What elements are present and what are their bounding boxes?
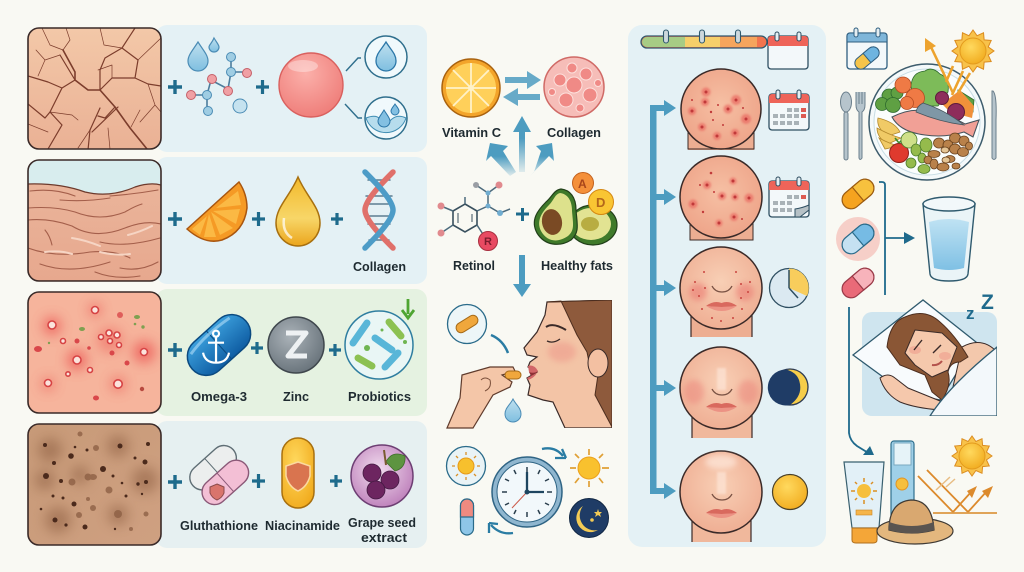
icon: collagen cells <box>544 57 604 117</box>
arrow: down <box>513 255 531 297</box>
icon: clock <box>492 457 562 527</box>
icon: calendar with capsule <box>847 28 887 72</box>
icon: niacinamide capsule <box>282 438 314 508</box>
icon: blank calendar <box>768 32 808 69</box>
arrow tree <box>650 100 676 499</box>
panel: acne row <box>28 289 427 416</box>
bracket and arrow to water <box>879 182 915 295</box>
icon: half clock <box>770 268 809 308</box>
panel: dry skin row <box>28 25 427 152</box>
icon: zinc coin <box>268 317 324 373</box>
label: Zzz: Z <box>981 291 994 314</box>
icon: spoon <box>840 92 852 160</box>
icon: plate of food <box>869 64 985 180</box>
icon: pink capsule <box>838 265 878 301</box>
icon: capsule badge <box>448 304 486 344</box>
label: Collagen: Collagen <box>353 259 406 274</box>
panel: wrinkled skin row <box>28 157 427 284</box>
label: Niacinamide: Niacinamide <box>265 518 340 533</box>
icon: retinol molecule: R <box>484 236 492 248</box>
arrow: to mouth <box>491 335 508 353</box>
plus sign <box>256 80 269 94</box>
panel: healing timeline <box>628 25 826 547</box>
plus sign <box>330 475 342 487</box>
icon: pill <box>460 499 474 535</box>
icon: fork <box>856 92 865 160</box>
illustration: timing clock <box>446 446 609 538</box>
icon: orange slice <box>442 59 500 117</box>
icon: sun reflected on ground <box>918 436 997 513</box>
plus sign <box>168 475 182 489</box>
icon: calendar week 2 <box>769 177 809 217</box>
icon: highlighted blue capsule <box>836 217 880 261</box>
icon: knife <box>992 91 996 160</box>
icon: probiotics <box>345 311 413 379</box>
face: moderate acne <box>680 156 762 240</box>
icon: grape seed extract <box>351 445 413 507</box>
panel: vitamin and collagen cycle <box>438 57 617 297</box>
icon: orange capsule <box>838 176 878 212</box>
plus sign <box>168 343 182 357</box>
plus sign <box>252 212 265 226</box>
icon: avocado and vitamins: A <box>578 177 587 191</box>
face: severe acne <box>681 69 761 150</box>
arrow: to sun protection <box>849 307 874 455</box>
icon: pink sphere <box>279 53 343 117</box>
arrow: clockwise top <box>542 448 566 458</box>
nuts <box>924 133 972 171</box>
label: Zinc: Zinc <box>283 389 309 404</box>
plus sign <box>329 344 341 356</box>
plus sign <box>168 212 182 226</box>
icon: down arrow <box>402 299 414 318</box>
illustration: taking a capsule <box>447 300 612 428</box>
icon: retinol molecule <box>438 182 510 250</box>
skin tile: acne <box>28 292 161 413</box>
icon: sunscreen tube <box>844 462 884 543</box>
label: Grape seed extract: extract <box>361 530 408 545</box>
panel: pigmentation row <box>28 421 427 548</box>
icon: collagen helix <box>365 172 393 248</box>
plus sign <box>251 342 263 354</box>
icon: sun badge <box>446 446 486 486</box>
hand with capsule <box>447 367 521 428</box>
illustration: sleeping woman <box>853 300 997 416</box>
icon: glass of water <box>923 197 975 281</box>
face: healed skin <box>680 451 762 542</box>
label: Grape seed extract: Grape seed <box>348 515 416 530</box>
icon: sun with rays <box>925 30 994 95</box>
label: Omega-3: Omega-3 <box>191 389 247 404</box>
icon: full sun disc <box>772 474 808 510</box>
icon: omega-3 capsule <box>178 305 259 384</box>
plus sign <box>168 80 182 94</box>
panel: lifestyle column <box>836 28 997 544</box>
icon: water absorption badge <box>365 97 407 139</box>
label: Grape seed extract <box>348 515 416 545</box>
icon: hydration drop badge <box>365 36 407 78</box>
arrows: upward <box>486 116 554 176</box>
icon: glutathione capsules <box>185 440 254 510</box>
icon: straw hat <box>877 500 953 544</box>
face: mild acne <box>680 247 762 337</box>
plus sign <box>252 474 265 488</box>
face: clear skin with slight redness <box>680 347 762 438</box>
arrows: exchange <box>503 71 541 106</box>
label: Probiotics: Probiotics <box>348 389 411 404</box>
icon: moon <box>570 498 608 538</box>
lettuce <box>911 69 948 106</box>
icon: molecule <box>186 52 252 116</box>
plus sign <box>331 213 343 225</box>
arrow: clockwise bottom <box>489 523 513 533</box>
icon: sunscreen spray <box>891 441 914 526</box>
label: Zzz <box>966 291 994 323</box>
icon: crescent moon <box>768 369 808 405</box>
icon: orange wedge <box>187 182 247 241</box>
plus sign <box>516 208 529 221</box>
label: Vitamin C: Vitamin C <box>442 125 502 140</box>
icon: oil drop <box>276 177 320 246</box>
label: Gluthathione: Gluthathione <box>180 518 258 533</box>
severity timeline bar <box>641 30 767 48</box>
icon: avocado and vitamins <box>534 172 617 245</box>
label: Collagen: Collagen <box>547 125 601 140</box>
icon: sun <box>570 449 609 487</box>
connector lines <box>345 58 362 118</box>
icon: water drops <box>188 38 219 71</box>
profile face <box>524 300 612 428</box>
label: Zzz: z <box>966 304 974 323</box>
icon: avocado and vitamins: D <box>596 195 605 210</box>
icon: calendar week 1 <box>769 90 809 130</box>
icon: water drop <box>505 399 521 422</box>
skin tile: wrinkles <box>28 160 161 281</box>
skin tile: cracked dry skin <box>28 28 161 150</box>
label: Retinol: Retinol <box>453 258 495 273</box>
label: Healthy fats: Healthy fats <box>541 258 613 273</box>
skin tile: dark spots <box>28 424 161 545</box>
